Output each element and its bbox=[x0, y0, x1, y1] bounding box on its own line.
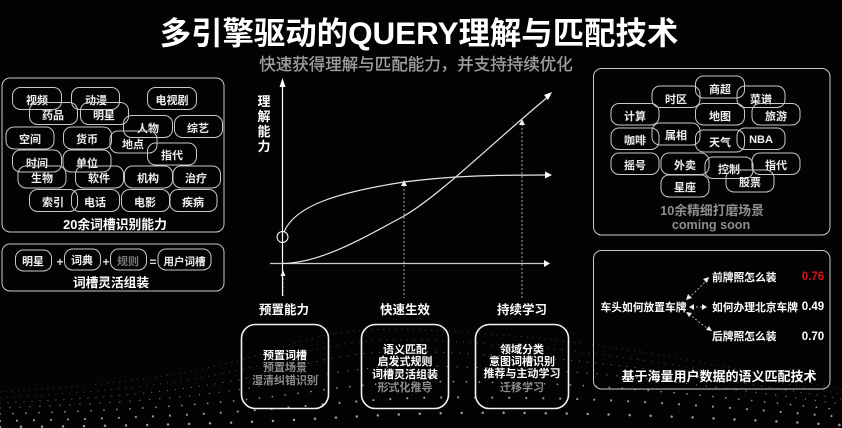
chip: 人物: 人物 bbox=[137, 121, 159, 135]
chip: 股票: 股票 bbox=[739, 176, 761, 189]
panel: semantic matching bbox=[594, 250, 830, 389]
chip: 商超 bbox=[696, 76, 744, 98]
panel: slot recognition bbox=[2, 78, 224, 232]
chip: 索引 bbox=[30, 190, 78, 212]
chip: 药品 bbox=[30, 102, 78, 124]
chip: 单位: 单位 bbox=[76, 156, 98, 170]
chip: 生物: 生物 bbox=[31, 171, 53, 185]
chip: 动漫 bbox=[72, 88, 120, 110]
chip: 软件: 软件 bbox=[88, 171, 110, 185]
chip: 词典 bbox=[64, 249, 100, 270]
subtitle: 快速获得理解与匹配能力，并支持持续优化 bbox=[259, 55, 573, 74]
panel caption: 基于海量用户数据的语义匹配技术 bbox=[621, 369, 817, 384]
chip: 属相: 属相 bbox=[665, 128, 687, 142]
panel caption: 20余词槽识别能力 bbox=[63, 217, 167, 232]
chip: 计算 bbox=[611, 104, 659, 125]
chip: 货币: 货币 bbox=[76, 132, 98, 146]
chip: 明星 bbox=[16, 250, 52, 271]
chip: 时区 bbox=[652, 86, 700, 108]
chip: 人物 bbox=[124, 116, 172, 138]
panel: scenarios bbox=[594, 68, 830, 235]
chip: 生物 bbox=[18, 166, 66, 188]
box bbox=[242, 324, 328, 408]
chip: 明星 bbox=[80, 102, 128, 124]
plus: + bbox=[102, 255, 110, 269]
chart: understanding capability curves bbox=[257, 78, 552, 298]
chip: 菜谱 bbox=[737, 86, 785, 108]
column: quick effect bbox=[362, 302, 448, 408]
chip: 地图 bbox=[696, 104, 744, 125]
heading: 预置能力 bbox=[259, 302, 309, 317]
box text bbox=[252, 348, 318, 387]
score 0.49: 0.49 bbox=[802, 301, 824, 313]
chip: 股票 bbox=[726, 170, 774, 192]
box text bbox=[372, 342, 438, 394]
box text: 领域分类 bbox=[500, 342, 544, 356]
chip: 地点: 地点 bbox=[122, 137, 144, 151]
chip: 外卖 bbox=[661, 153, 709, 174]
plus: + bbox=[56, 255, 64, 269]
box text: 意图词槽识别 bbox=[489, 354, 555, 368]
chip: 天气 bbox=[696, 130, 744, 152]
chip: 综艺: 综艺 bbox=[187, 121, 209, 135]
chip: NBA: NBA bbox=[749, 134, 773, 146]
chip: 时间: 时间 bbox=[26, 156, 48, 170]
chip: 咖啡: 咖啡 bbox=[624, 133, 646, 147]
dotted guide: quick effect bbox=[401, 180, 407, 298]
chip: 电视剧 bbox=[148, 88, 196, 110]
y axis label: 能 bbox=[257, 124, 271, 139]
column: continuous learning bbox=[476, 302, 568, 408]
chip: 时间 bbox=[12, 150, 62, 172]
chip: 咖啡 bbox=[611, 128, 659, 150]
chip: 治疗 bbox=[173, 166, 220, 188]
y axis bbox=[280, 78, 286, 296]
box text: 预置场景 bbox=[263, 361, 307, 374]
chip: 疾病: 疾病 bbox=[182, 195, 204, 209]
box text: 推荐与主动学习 bbox=[484, 366, 560, 380]
chip: 外卖: 外卖 bbox=[674, 158, 696, 172]
chip: 词典: 词典 bbox=[71, 253, 93, 267]
chip: 机构: 机构 bbox=[137, 171, 159, 185]
box text: 迁移学习 bbox=[500, 380, 544, 394]
chip: 旅游 bbox=[752, 104, 800, 125]
chip: 旅游: 旅游 bbox=[765, 109, 787, 123]
chip: 空间: 空间 bbox=[19, 132, 41, 146]
chip: 空间 bbox=[6, 127, 54, 149]
chip: 货币 bbox=[64, 127, 112, 149]
chip: 视频: 视频 bbox=[26, 93, 48, 107]
chip: 用户词槽: 用户词槽 bbox=[164, 255, 206, 268]
heading: 持续学习 bbox=[497, 302, 547, 317]
candidate 2: 如何办理北京车牌 bbox=[712, 301, 798, 314]
box text: 湿清纠错识别 bbox=[252, 373, 318, 387]
box bbox=[362, 324, 448, 408]
chip: 指代: 指代 bbox=[161, 148, 183, 162]
chip: 药品: 药品 bbox=[42, 108, 64, 122]
chip: 电话 bbox=[72, 190, 120, 212]
chip: 时区: 时区 bbox=[665, 92, 687, 106]
candidate 1: 前牌照怎么装 bbox=[712, 271, 777, 284]
x axis bbox=[270, 260, 550, 267]
heading: 快速生效 bbox=[380, 302, 430, 317]
chip: 指代 bbox=[148, 143, 196, 165]
panel caption: 词槽灵活组装 bbox=[73, 275, 149, 290]
chip: 菜谱: 菜谱 bbox=[750, 92, 772, 106]
box text: 预置词槽 bbox=[263, 348, 307, 362]
chip: 指代 bbox=[752, 153, 800, 174]
chip: 星座 bbox=[661, 175, 709, 197]
chip: 控制 bbox=[705, 157, 753, 178]
chip: 地点 bbox=[110, 131, 157, 153]
box text bbox=[484, 342, 560, 394]
chip: 索引: 索引 bbox=[42, 195, 64, 209]
candidate 3: 后牌照怎么装 bbox=[712, 330, 777, 343]
box text: 语义匹配 bbox=[383, 342, 427, 356]
chip: 明星: 明星 bbox=[93, 109, 115, 122]
panel: slot assembly bbox=[2, 244, 224, 291]
chip: 疾病 bbox=[170, 190, 217, 212]
chip: 治疗: 治疗 bbox=[185, 171, 207, 185]
box bbox=[476, 324, 568, 408]
box text: 形式化推导 bbox=[378, 380, 432, 394]
score 0.70: 0.70 bbox=[802, 331, 824, 343]
chip: 电影 bbox=[122, 190, 170, 212]
y axis label bbox=[257, 94, 271, 154]
chip: 计算: 计算 bbox=[624, 109, 646, 123]
chip: 控制: 控制 bbox=[718, 162, 740, 176]
y axis label: 理 bbox=[257, 94, 271, 109]
chip: NBA bbox=[737, 128, 785, 150]
chip: 动漫: 动漫 bbox=[85, 93, 107, 107]
chip: 机构 bbox=[124, 166, 172, 188]
chip: 地图: 地图 bbox=[709, 109, 731, 123]
panel caption: 10余精细打磨场景 bbox=[660, 203, 764, 218]
chip: 电话: 电话 bbox=[84, 195, 106, 209]
chip: 规则 bbox=[110, 249, 146, 270]
chip: 软件 bbox=[76, 166, 124, 188]
coming soon label: coming soon bbox=[672, 218, 750, 232]
chip: 摇号: 摇号 bbox=[624, 158, 646, 172]
chip: 商超: 商超 bbox=[709, 82, 731, 96]
chip: 指代: 指代 bbox=[765, 158, 787, 172]
y axis label: 解 bbox=[257, 109, 271, 124]
chip: 明星: 明星 bbox=[22, 255, 44, 268]
dotted guide: preset bbox=[280, 270, 286, 298]
curve: quick effect bbox=[284, 172, 552, 232]
chip: 摇号 bbox=[611, 153, 659, 174]
y axis label: 力 bbox=[257, 139, 271, 154]
dotted guide: continuous learning bbox=[519, 119, 525, 298]
chip: 用户词槽 bbox=[158, 249, 211, 270]
column: preset capability bbox=[242, 302, 328, 408]
chip: 规则: 规则 bbox=[117, 255, 139, 268]
box text: 词槽灵活组装 bbox=[372, 367, 438, 381]
chip: 综艺 bbox=[174, 116, 222, 138]
chip: 星座: 星座 bbox=[674, 180, 696, 194]
equals: = bbox=[149, 255, 157, 269]
chip: 电视剧: 电视剧 bbox=[156, 93, 188, 107]
score 0.76: 0.76 bbox=[802, 271, 824, 283]
box text: 启发式规则 bbox=[378, 354, 432, 368]
chip: 电影: 电影 bbox=[134, 195, 156, 209]
chip: 属相 bbox=[652, 123, 700, 145]
background dotted wave bbox=[0, 329, 842, 427]
query text: 车头如何放置车牌 bbox=[600, 301, 687, 314]
title: 多引擎驱动的QUERY理解与匹配技术 bbox=[160, 16, 678, 51]
chip: 单位 bbox=[63, 150, 111, 172]
curve: continuous learning bbox=[282, 92, 552, 264]
circle marker bbox=[277, 232, 288, 242]
chip: 天气: 天气 bbox=[709, 135, 731, 149]
chip: 视频 bbox=[12, 88, 62, 110]
arrows: query to candidates bbox=[686, 277, 712, 331]
